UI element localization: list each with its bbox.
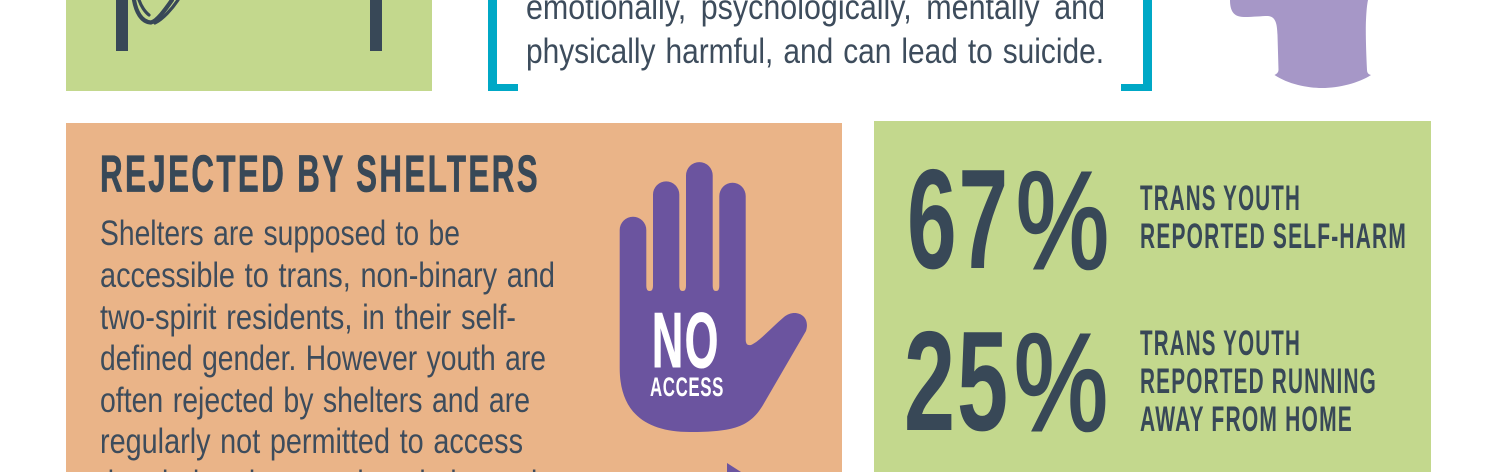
stat label: TRANS YOUTH <box>1140 324 1301 363</box>
body text: defined gender. However youth are <box>100 339 546 378</box>
stat label <box>1140 179 1407 256</box>
panel: rejected by shelters <box>66 123 842 472</box>
body text: two-spirit residents, in their self- <box>100 298 516 337</box>
icon: no access hand <box>620 162 807 432</box>
stat label: AWAY FROM HOME <box>1140 400 1353 439</box>
body text: regularly not permitted to access <box>100 422 523 461</box>
stat label: TRANS YOUTH <box>1140 179 1301 218</box>
body text: often rejected by shelters and are <box>100 381 530 420</box>
quote block with brackets <box>488 0 1152 91</box>
body text: accessible to trans, non-binary and <box>100 256 555 295</box>
stat: 25 percent: 25 <box>904 302 1010 461</box>
icon: rope loop <box>134 0 178 23</box>
quote text: physically harmful, and can lead to suicide. <box>526 32 1104 71</box>
body text: Shelters are supposed to be <box>100 214 460 253</box>
stat: 25 percent: % <box>1014 306 1108 460</box>
ACCESS label: ACCESS <box>650 372 724 402</box>
arrow: purple triangle <box>727 463 741 472</box>
stat: 67 percent <box>907 140 1407 299</box>
body text <box>100 214 555 461</box>
quote text <box>526 0 1105 71</box>
left bracket <box>488 0 518 91</box>
panel: statistics <box>874 121 1431 472</box>
icon: left post <box>116 0 128 51</box>
panel: top-left green with icon <box>66 0 432 91</box>
right bracket <box>1121 0 1152 91</box>
stat: 25 percent <box>904 302 1377 461</box>
icon: right post <box>370 0 382 51</box>
NO label: NO <box>652 296 720 384</box>
stat: 67 percent: 67 <box>907 140 1010 299</box>
icon: purple head and neck <box>1230 0 1371 88</box>
stat: 67 percent: % <box>1016 144 1109 298</box>
stat label <box>1140 324 1377 439</box>
heading: REJECTED BY SHELTERS <box>100 146 540 204</box>
